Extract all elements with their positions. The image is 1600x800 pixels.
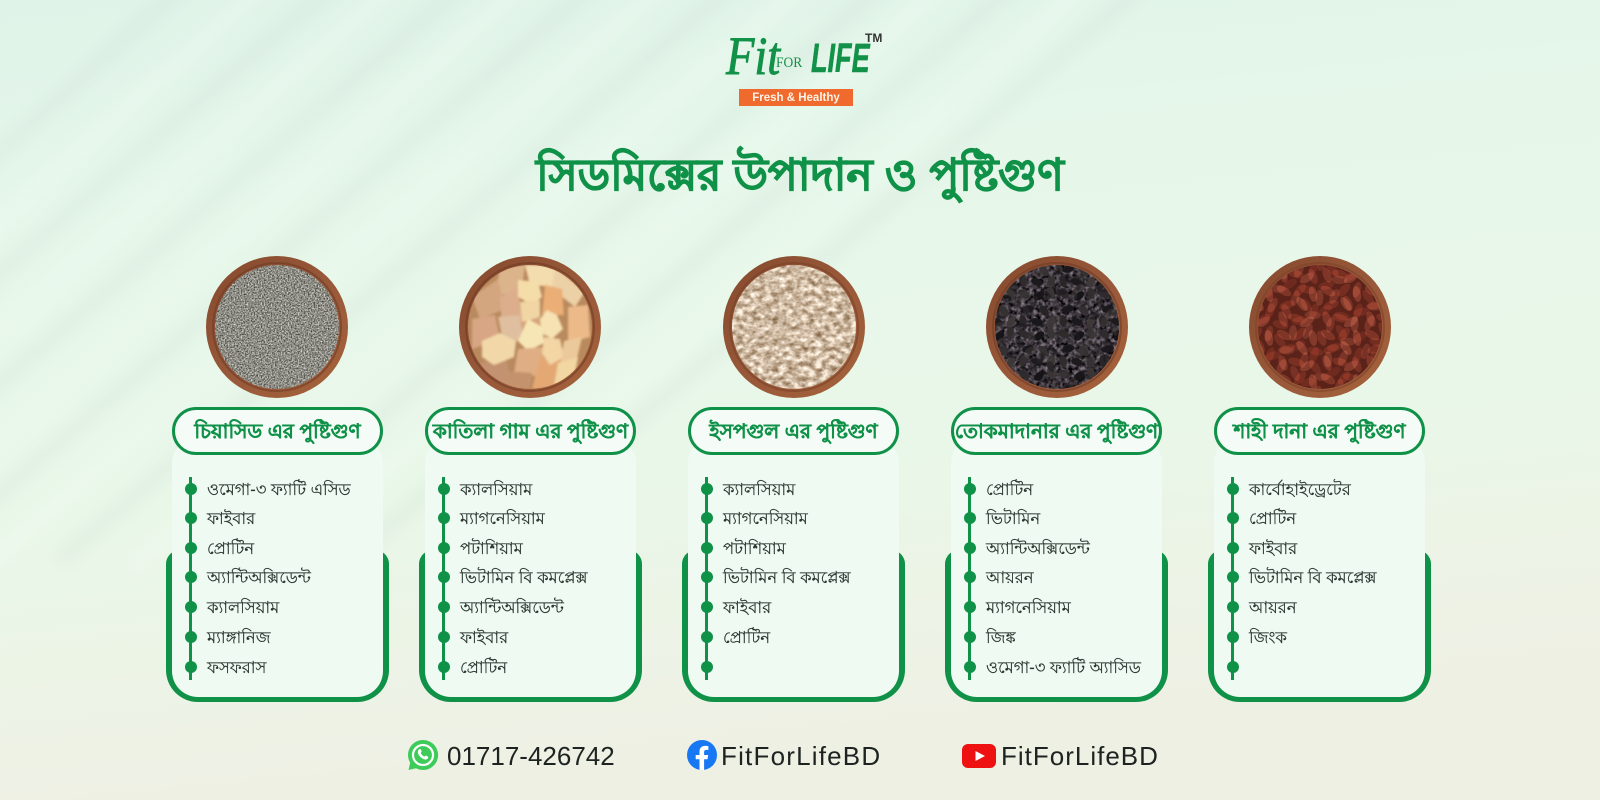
panel: chia seed: [166, 407, 389, 702]
panel: katila gum: [419, 407, 642, 702]
nutrient list: ভিটামিন বি কমপ্লেক্স: [1249, 569, 1376, 587]
nutrient list: [1227, 477, 1377, 680]
nutrient list: কার্বোহাইড্রেটের: [1249, 481, 1351, 499]
panel heading: কাতিলা গাম এর পুষ্টিগুণ: [433, 421, 628, 443]
icon: youtube: [962, 744, 996, 768]
bowl: chia seeds: [206, 256, 348, 398]
nutrient list: প্রোটিন: [207, 540, 254, 558]
nutrient list: পটাশিয়াম: [723, 540, 786, 558]
nutrient list: আয়রন: [1249, 599, 1297, 617]
tagline bar: [739, 89, 853, 106]
bowl: katila gum: [459, 256, 601, 398]
trademark: TM: [865, 31, 882, 45]
tagline bar: Fresh & Healthy: [752, 92, 840, 104]
nutrient list: [964, 477, 1142, 680]
panel heading: [1214, 407, 1425, 455]
nutrient list: ভিটামিন: [986, 510, 1040, 528]
nutrient list: অ্যান্টিঅক্সিডেন্ট: [207, 569, 311, 587]
nutrient list: ম্যাগনেসিয়াম: [986, 599, 1071, 617]
panel heading: [951, 407, 1162, 455]
panel heading: চিয়াসিড এর পুষ্টিগুণ: [194, 421, 361, 443]
nutrient list: ক্যালসিয়াম: [207, 599, 279, 617]
nutrient list: ক্যালসিয়াম: [723, 481, 795, 499]
nutrient list: ওমেগা-৩ ফ্যাটি এসিড: [207, 481, 351, 499]
nutrient list: অ্যান্টিঅক্সিডেন্ট: [460, 599, 564, 617]
nutrient list: ফাইবার: [460, 629, 508, 647]
logo: [725, 26, 882, 106]
panel heading: ইসপগুল এর পুষ্টিগুণ: [709, 421, 878, 443]
nutrient list: প্রোটিন: [723, 629, 770, 647]
panel: shahi dana: [1208, 407, 1431, 702]
panel heading: [172, 407, 383, 455]
logo word: LIFE: LIFE: [811, 35, 870, 81]
title: সিডমিক্সের উপাদান ও পুষ্টিগুণ: [536, 151, 1064, 200]
nutrient list: প্রোটিন: [1249, 510, 1296, 528]
nutrient list: ওমেগা-৩ ফ্যাটি অ্যাসিড: [986, 659, 1141, 677]
facebook handle: FitForLifeBD: [721, 741, 881, 771]
youtube handle: FitForLifeBD: [1001, 741, 1159, 771]
panel: isabgol: [682, 407, 905, 702]
panel heading: [425, 407, 636, 455]
nutrient list: ক্যালসিয়াম: [460, 481, 532, 499]
icon: facebook: [687, 740, 717, 770]
bowl: basil seeds: [986, 256, 1128, 398]
bowl: shahi dana: [1249, 256, 1391, 398]
panel heading: [688, 407, 899, 455]
nutrient list: ফসফরাস: [207, 659, 266, 677]
bowl: isabgol: [723, 256, 865, 398]
nutrient list: জিঙ্ক: [986, 629, 1016, 647]
nutrient list: অ্যান্টিঅক্সিডেন্ট: [986, 540, 1090, 558]
icon: whatsapp: [408, 740, 438, 770]
nutrient list: ফাইবার: [207, 510, 255, 528]
nutrient list: আয়রন: [986, 569, 1034, 587]
nutrient list: প্রোটিন: [460, 659, 507, 677]
logo word: Fit: Fit: [726, 26, 780, 86]
panel: basil seed: [945, 407, 1168, 702]
panel heading: তোকমাদানার এর পুষ্টিগুণ: [955, 421, 1158, 443]
nutrient list: [701, 477, 851, 680]
nutrient list: ভিটামিন বি কমপ্লেক্স: [460, 569, 587, 587]
nutrient list: ভিটামিন বি কমপ্লেক্স: [723, 569, 850, 587]
panel heading: শাহী দানা এর পুষ্টিগুণ: [1234, 421, 1405, 443]
nutrient list: [438, 477, 588, 680]
whatsapp number: 01717-426742: [447, 741, 615, 771]
logo word: FOR: FOR: [776, 55, 802, 71]
nutrient list: জিংক: [1249, 629, 1287, 647]
nutrient list: পটাশিয়াম: [460, 540, 523, 558]
nutrient list: ম্যাগনেসিয়াম: [723, 510, 808, 528]
nutrient list: [185, 477, 351, 680]
nutrient list: ম্যাগনেসিয়াম: [460, 510, 545, 528]
nutrient list: ম্যাঙ্গানিজ: [207, 629, 270, 647]
nutrient list: প্রোটিন: [986, 481, 1033, 499]
nutrient list: ফাইবার: [723, 599, 771, 617]
nutrient list: ফাইবার: [1249, 540, 1297, 558]
